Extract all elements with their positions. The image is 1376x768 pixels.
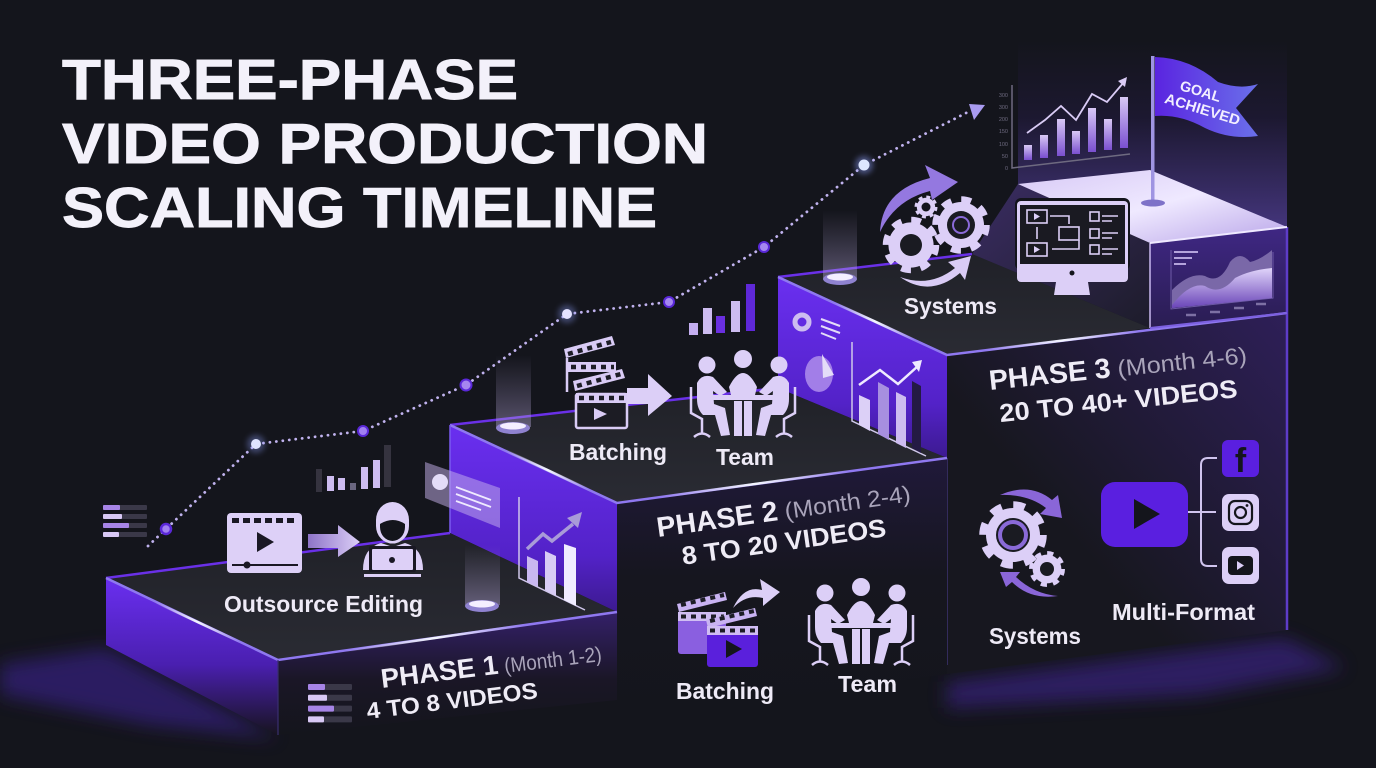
stage 3 edges xyxy=(778,227,1287,665)
text: phase 2: 8 TO 20 VIDEOS xyxy=(680,514,888,571)
ground glow xyxy=(0,638,1345,738)
arrow: batching to team xyxy=(627,374,672,416)
label: systems lower: Systems xyxy=(989,623,1081,649)
text: phase 1: (Month 1-2) xyxy=(503,643,603,678)
arrow head xyxy=(969,104,985,120)
title: SCALING TIMELINE xyxy=(62,176,657,240)
icon: clapper stack xyxy=(564,336,627,428)
title: THREE-PHASE xyxy=(62,48,518,112)
text: phase 3: 20 TO 40+ VIDEOS xyxy=(998,375,1239,428)
icon: bars phase 1 xyxy=(316,445,391,492)
milestone dots xyxy=(161,156,873,534)
chart: growth chart xyxy=(999,77,1130,172)
upper block side xyxy=(972,184,1150,328)
icon: goal flag: GOAL xyxy=(1178,78,1223,106)
light beam 3 xyxy=(823,210,857,285)
chart: area chart xyxy=(1171,250,1273,315)
light beam 2 xyxy=(496,355,531,434)
upper block front xyxy=(1150,227,1287,328)
label: systems upper: Systems xyxy=(904,293,997,319)
text: phase 2 xyxy=(655,477,917,574)
stage 3 front wall xyxy=(947,313,1287,674)
icon: wall donut and list xyxy=(795,315,840,339)
chart: growth chart: 300 xyxy=(999,105,1008,111)
chart: growth chart: 50 xyxy=(1002,154,1008,160)
chart: wall chart phase 3 xyxy=(852,342,926,456)
stage 3 top surface xyxy=(778,254,1150,355)
icon: workflow monitor xyxy=(1015,198,1130,295)
stage 2 left wall xyxy=(450,425,617,612)
chart: growth chart: 150 xyxy=(999,129,1008,135)
icon: facebook: f xyxy=(1235,442,1247,480)
label: team: Team xyxy=(716,444,774,470)
stage 1 top surface xyxy=(106,533,617,660)
arrow: curved xyxy=(733,579,780,608)
stage 1 xyxy=(106,533,617,735)
label: batching lower: Batching xyxy=(676,678,774,704)
icon: editor with laptop xyxy=(363,502,423,577)
chart: growth chart: 200 xyxy=(999,117,1008,123)
text: phase 3: (Month 4-6) xyxy=(1116,342,1248,381)
back glow panel xyxy=(1018,40,1287,232)
dotted growth path xyxy=(148,104,985,546)
title: VIDEO PRODUCTION xyxy=(62,112,708,176)
label: multi-format: Multi-Format xyxy=(1112,599,1255,625)
icon: instagram xyxy=(1222,494,1259,531)
text: phase 1 xyxy=(361,637,606,724)
icon: goal flag: ACHIEVED xyxy=(1163,91,1242,129)
text: phase 3: PHASE 3 xyxy=(987,352,1112,396)
label: team lower: Team xyxy=(838,671,897,697)
light beam 1 xyxy=(465,545,500,612)
chart: growth chart: 100 xyxy=(999,142,1008,148)
stage 2 top surface xyxy=(450,388,947,503)
icon: left list xyxy=(103,505,147,537)
icon: wall pie xyxy=(805,354,834,392)
text: phase 2: (Month 2-4) xyxy=(783,481,912,524)
stage 1 left wall xyxy=(106,578,278,735)
label: batching: Batching xyxy=(569,439,667,465)
text: phase 1: PHASE 1 xyxy=(379,650,500,694)
title xyxy=(62,48,708,240)
icon: purple clappers xyxy=(677,592,758,667)
icon: video tile xyxy=(1222,547,1259,584)
stage 2 front wall xyxy=(617,458,947,722)
stage 3 left wall xyxy=(778,277,947,458)
text: phase 1: 4 TO 8 VIDEOS xyxy=(365,677,539,724)
stage 3 xyxy=(778,170,1287,674)
stage 2 edges xyxy=(450,388,947,533)
stage 1 edges xyxy=(106,533,617,735)
icon: team phase 2 xyxy=(691,350,795,437)
text: phase 2: PHASE 2 xyxy=(655,495,780,543)
icon: systems gears lower xyxy=(985,490,1062,597)
chart: wall chart phase 1 xyxy=(519,497,585,610)
arrow: video to editor xyxy=(308,525,360,557)
text: phase 3 xyxy=(987,338,1252,429)
upper block top xyxy=(1018,170,1287,243)
icon: team lower xyxy=(809,578,913,665)
icon: video card xyxy=(227,513,302,573)
icon: wall card phase 1 xyxy=(425,462,500,528)
icon: video play tile xyxy=(1101,482,1188,547)
icon: front list phase 1 xyxy=(308,684,352,722)
icon: gears with arrows xyxy=(880,165,985,287)
icon: bars phase 2 xyxy=(689,284,755,335)
connector bracket xyxy=(1188,458,1217,566)
chart: growth chart: 300 xyxy=(999,93,1008,99)
stage 2 xyxy=(450,388,947,722)
chart: growth chart: 0 xyxy=(1005,166,1008,172)
icon: facebook xyxy=(1222,440,1259,480)
label: outsource editing: Outsource Editing xyxy=(224,591,423,617)
icon: goal flag xyxy=(1141,56,1258,206)
stage 1 front wall xyxy=(278,612,617,735)
